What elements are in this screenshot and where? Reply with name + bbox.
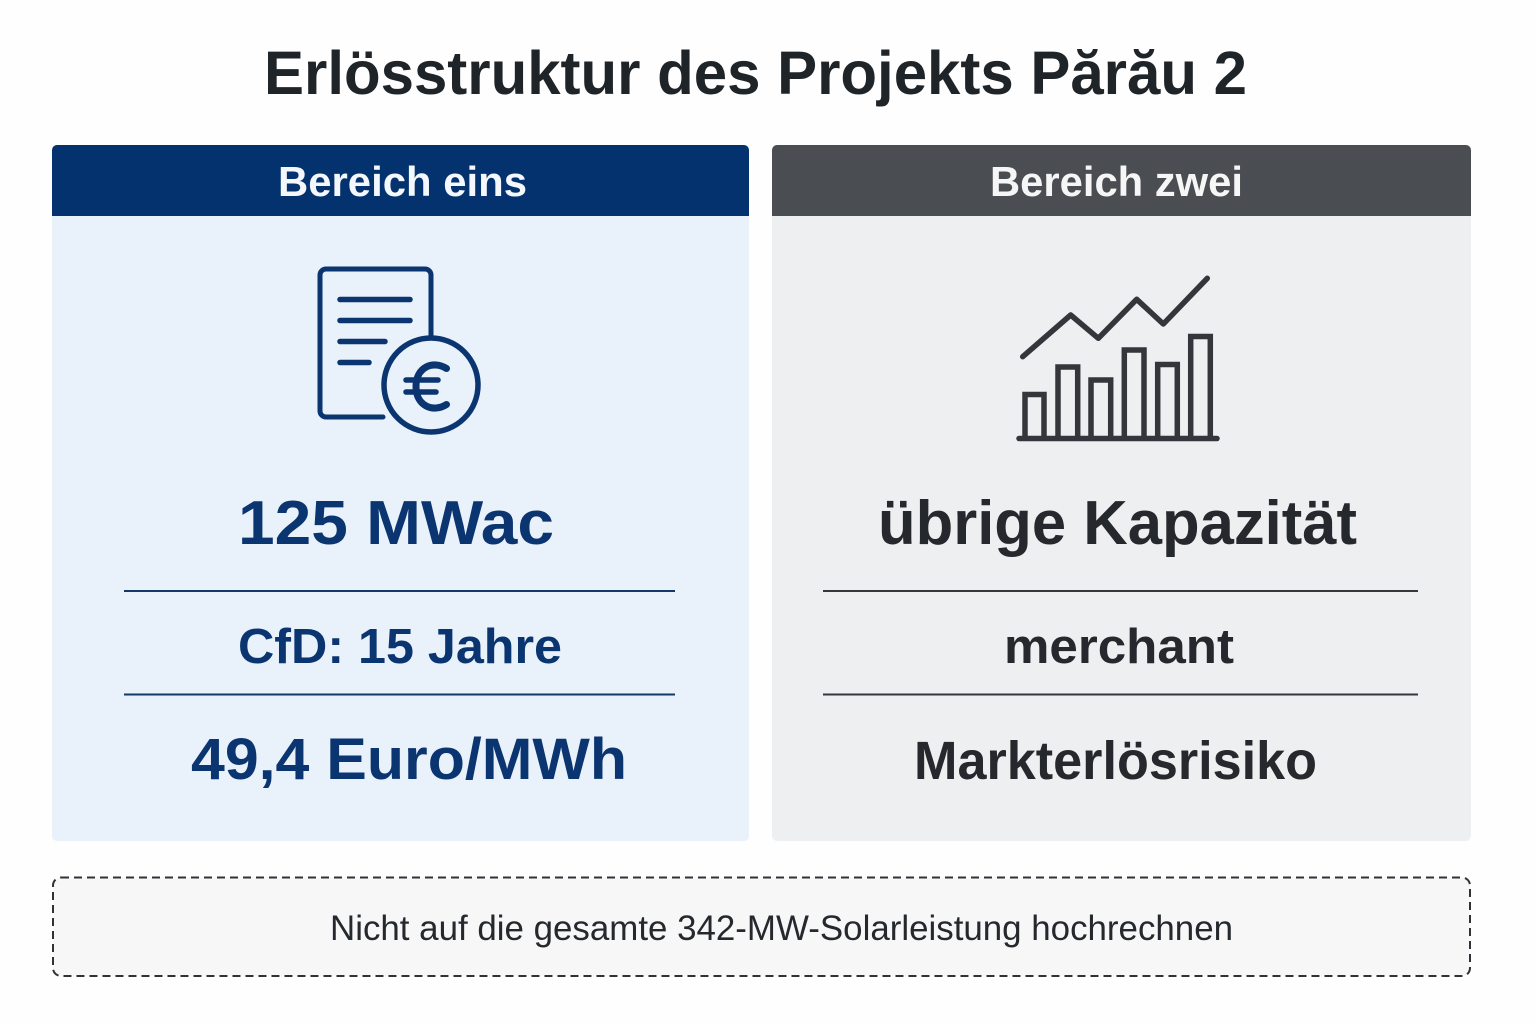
callout: note (53, 878, 1470, 976)
price: 49,4 Euro/MWh: 49,4 Euro/MWh (191, 727, 627, 792)
risk: Markterlösrisiko: Markterlösrisiko (914, 731, 1317, 791)
title: Erlösstruktur des Projekts Părău 2 (264, 39, 1247, 107)
header: Bereich zwei: Bereich zwei (990, 158, 1243, 205)
divider (124, 694, 675, 696)
header: Bereich eins (52, 145, 749, 216)
value: 125 MWac: 125 MWac (238, 489, 554, 558)
value: übrige Kapazität: übrige Kapazität (878, 489, 1357, 558)
icon: bar chart with trend line (1019, 278, 1217, 438)
header: Bereich zwei (772, 145, 1471, 216)
term: CfD 15 Jahre: CfD: 15 Jahre (238, 620, 562, 674)
term: merchant: merchant (1004, 620, 1234, 674)
divider (823, 590, 1418, 592)
panel: Bereich eins (52, 145, 749, 841)
divider (823, 694, 1418, 696)
icon: document with euro coin (320, 269, 478, 432)
panel: Bereich zwei (772, 145, 1471, 841)
divider (124, 590, 675, 592)
header: Bereich eins: Bereich eins (278, 158, 527, 205)
callout: note: Nicht auf die gesamte 342-MW-Solarleistung hochrechnen (330, 909, 1233, 948)
